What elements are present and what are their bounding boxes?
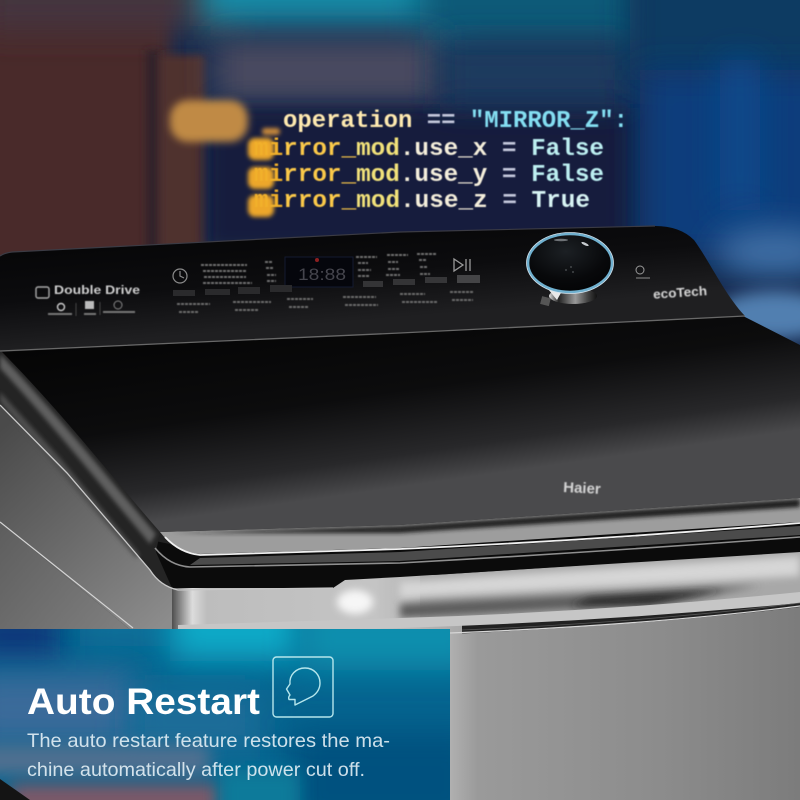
body front panel	[450, 607, 800, 800]
brand logo: Haier	[563, 479, 601, 498]
side panel upper	[0, 400, 180, 632]
handle highlight	[337, 590, 373, 614]
description: chine automatically after power cut off.	[27, 759, 365, 781]
power button	[636, 266, 650, 278]
left rim outer line	[0, 405, 333, 590]
option labels	[201, 254, 437, 283]
dark rim band	[150, 520, 800, 588]
code text: mirror_mod.use_x = False	[254, 136, 604, 163]
buttons	[173, 275, 480, 296]
washing machine	[0, 226, 800, 800]
second lip	[155, 537, 800, 567]
code text: mirror_mod.use_y = False	[254, 162, 604, 189]
code text: operation == "MIRROR_Z":	[283, 108, 628, 135]
description	[27, 730, 390, 781]
code text: mirror_mod.use_z = True	[254, 188, 590, 215]
blurred background	[0, 0, 800, 358]
lip highlight	[165, 523, 800, 555]
icon: head outline	[273, 657, 333, 717]
code text	[254, 108, 628, 215]
handle shading	[400, 556, 800, 618]
Double Drive logo: Double Drive	[54, 285, 140, 297]
panel bottom edge	[0, 316, 745, 351]
heading: Auto Restart	[27, 681, 260, 722]
body top line	[450, 606, 800, 633]
selector dial	[526, 232, 614, 306]
control panel details	[36, 232, 707, 316]
Double Drive logo	[36, 285, 140, 316]
control panel	[0, 226, 745, 352]
front face under handle	[172, 575, 462, 635]
corner of machine	[0, 779, 30, 800]
blurred orange highlight	[170, 100, 248, 142]
lid lip	[160, 498, 800, 554]
left rim band	[0, 350, 172, 588]
digital display	[285, 257, 353, 287]
handle recess	[420, 551, 800, 623]
lower option labels	[177, 292, 473, 312]
code overlay	[248, 108, 628, 217]
left rim shading	[0, 354, 156, 558]
side crease line	[0, 522, 133, 628]
icon: play pause	[454, 259, 470, 271]
icon: clock	[173, 269, 187, 283]
technology badge: ecoTech	[653, 284, 707, 302]
panel top edge	[0, 226, 655, 256]
digital display: 18:88	[298, 265, 346, 284]
handle lower rim	[178, 592, 800, 632]
blurred code line starts	[248, 128, 280, 217]
blurred panel background	[0, 629, 450, 800]
panel: auto restart	[0, 629, 450, 800]
side panel lower	[0, 522, 133, 632]
glass lid	[0, 316, 800, 532]
description: The auto restart feature restores the ma-	[27, 730, 390, 752]
